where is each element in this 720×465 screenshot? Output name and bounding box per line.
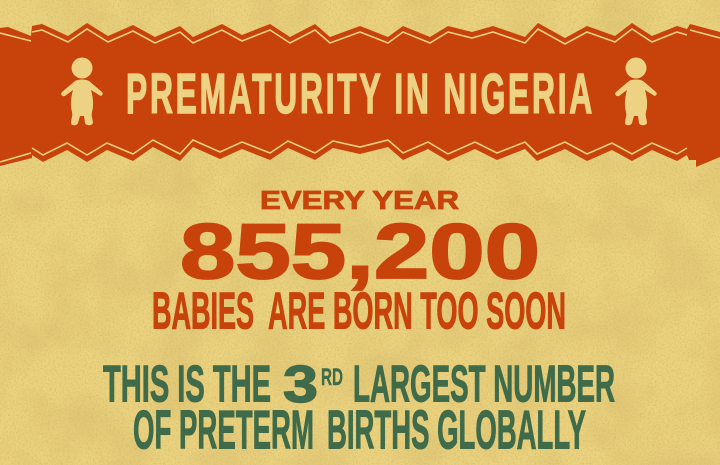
text: third largest number line <box>103 356 615 414</box>
baby icon left <box>61 58 103 125</box>
banner bottom left seam line <box>0 153 31 162</box>
banner top zigzag line <box>0 33 31 41</box>
banner body <box>0 23 720 167</box>
banner top right seam line <box>690 30 720 38</box>
baby icon right <box>615 58 657 125</box>
text: third largest number line: RD <box>321 364 343 391</box>
text: babies are born too soon: BABIES <box>152 282 254 340</box>
text: third largest number line: THIS IS THE <box>103 356 271 414</box>
text: third largest number line: 3 <box>283 356 318 414</box>
panel: title banner <box>0 23 720 167</box>
text: every year: EVERY YEAR <box>260 187 459 215</box>
text: of preterm births globally: OF PRETERM <box>133 400 314 460</box>
banner top zigzag main line <box>32 29 687 44</box>
text: 855,200 statistic: 855,200 <box>180 207 540 295</box>
banner bottom zigzag line <box>32 140 687 155</box>
text: babies are born too soon <box>152 282 566 340</box>
